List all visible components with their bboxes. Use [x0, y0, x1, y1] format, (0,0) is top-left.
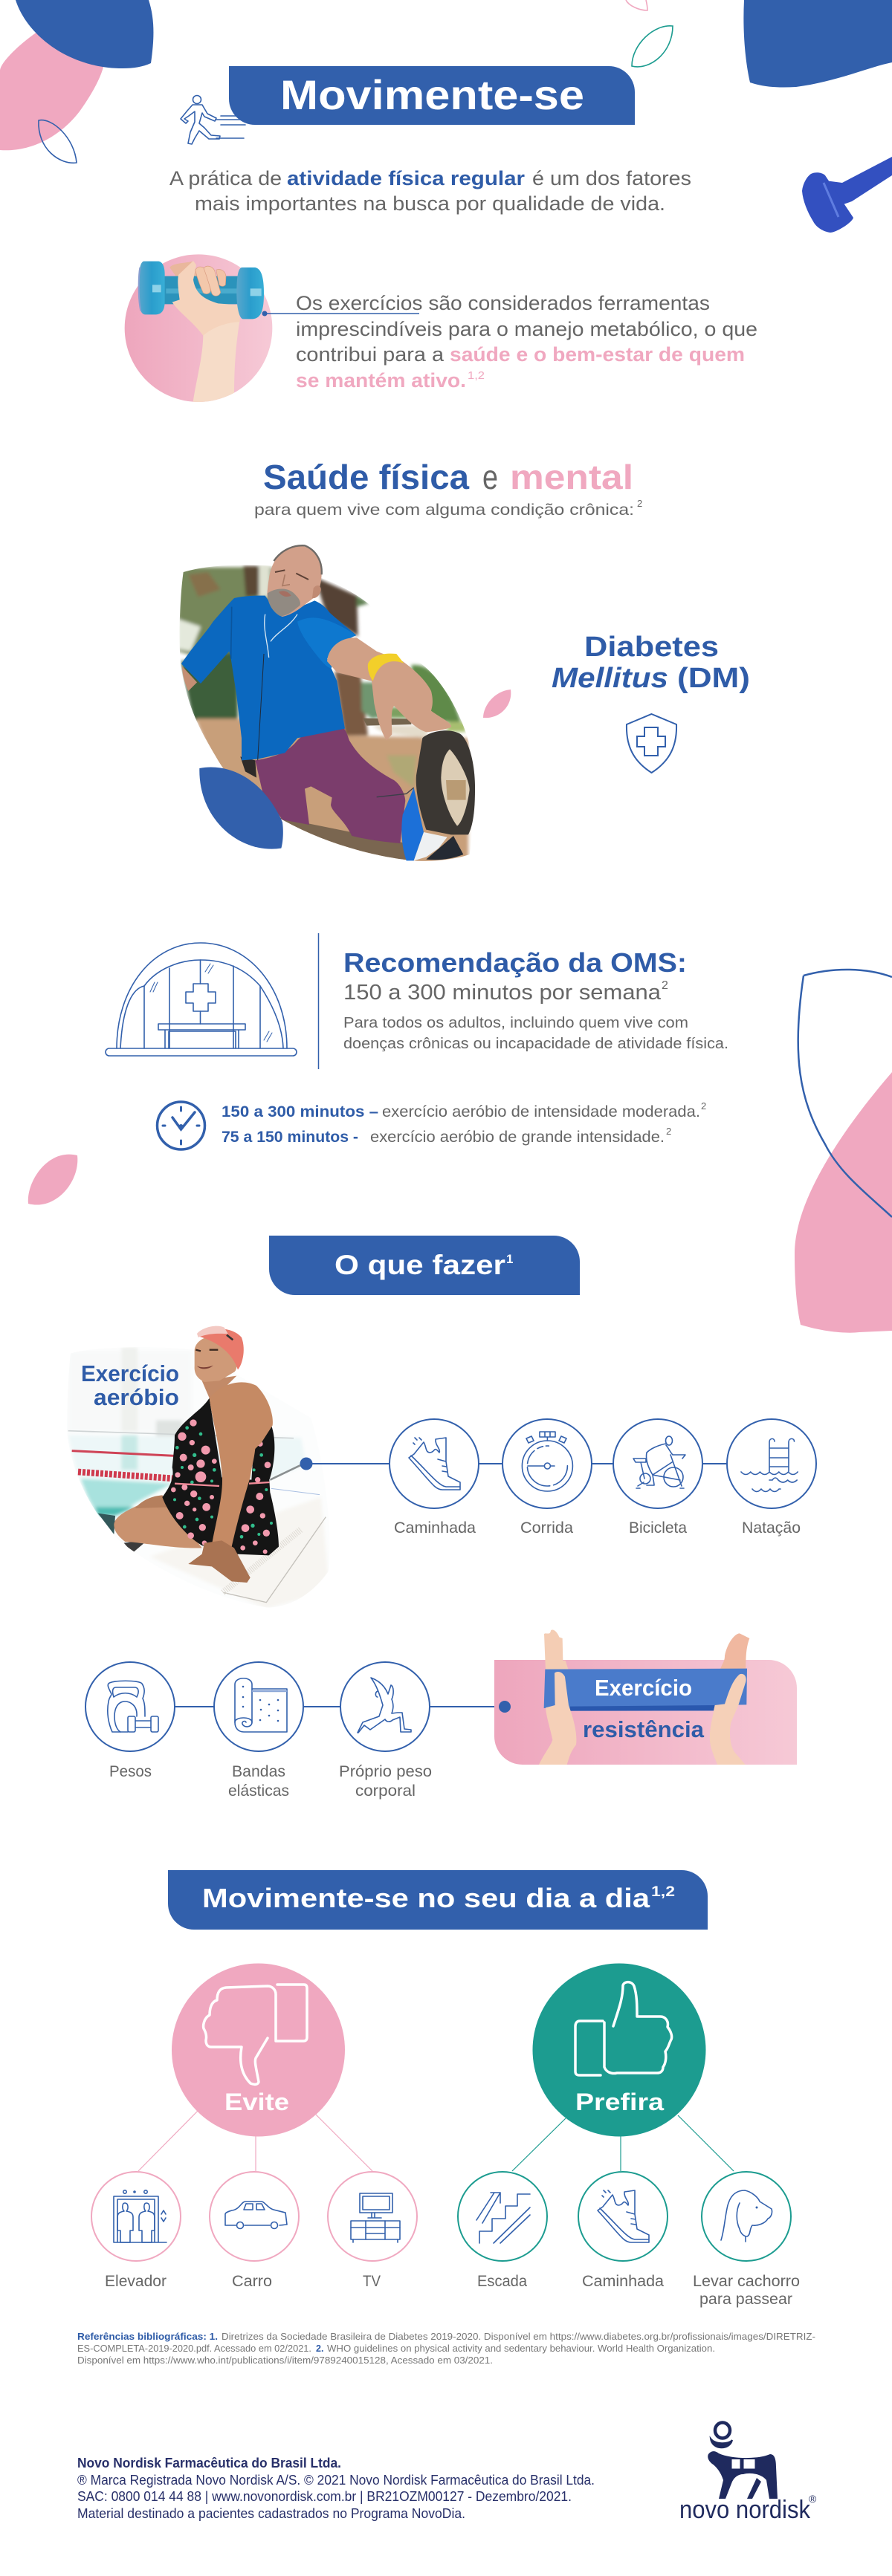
- text: Recomendação da OMS: 2: [662, 979, 668, 992]
- text: Exercício aeróbio: [81, 1360, 179, 1410]
- labels: resistance: Pesos: [109, 1762, 152, 1780]
- header: O que fazer: 1: [506, 1252, 513, 1266]
- references: ES-COMPLETA-2019-2020.pdf. Acessado em 02/2021.: [77, 2343, 311, 2354]
- text block: exercises: [296, 292, 757, 392]
- icon: próprio peso corporal: [340, 1662, 430, 1751]
- intro text: atividade física regular: [287, 167, 526, 189]
- photo: woman at the pool: [63, 1326, 336, 1616]
- text block: exercises: saúde e o bem-estar de quem: [450, 343, 745, 366]
- icon: pesos: [85, 1662, 175, 1751]
- labels: daily activities: Caminhada: [582, 2273, 664, 2290]
- header: O que fazer: [269, 1236, 580, 1295]
- panel: evite: Evite: [224, 2089, 289, 2115]
- labels: daily activities: Levar cachorro: [693, 2273, 800, 2290]
- text: Diabetes Mellitus: Mellitus: [552, 663, 668, 694]
- small pink leaf: [483, 690, 511, 718]
- connector lines: evite: [138, 2111, 372, 2171]
- references: 2.: [316, 2343, 323, 2354]
- icon: carro: [210, 2172, 299, 2261]
- icon: tv: [328, 2172, 417, 2261]
- text block: exercises: contribui para a: [296, 343, 444, 366]
- header: Movimente-se: Movimente-se: [280, 71, 584, 118]
- labels: daily activities: Elevador: [105, 2273, 167, 2290]
- panel: prefira: [532, 1963, 706, 2137]
- icon: natação: [727, 1419, 816, 1508]
- icon: corrida: [502, 1419, 592, 1508]
- references: [77, 2332, 815, 2366]
- footer company text: Novo Nordisk Farmacêutica do Brasil Ltda.: [77, 2456, 341, 2470]
- photo: man stretching: [178, 545, 483, 864]
- references: Referências bibliográficas: 1.: [77, 2332, 218, 2342]
- connector: resistance: [175, 1706, 505, 1707]
- labels: resistance: Bandas: [232, 1762, 285, 1780]
- logo: novo nordisk: ®: [809, 2493, 817, 2505]
- header: Movimente-se no seu dia a dia: 1,2: [651, 1884, 675, 1900]
- heading: saúde física e mental: para quem vive com alguma condição crônica:: [254, 502, 634, 519]
- intro text: mais importantes na busca por qualidade de vida.: [195, 192, 665, 215]
- header: Movimente-se: [229, 66, 635, 125]
- panel: resistance exercise with hands and band: Exercício: [595, 1675, 692, 1701]
- icon: caminhada: [390, 1419, 479, 1508]
- header: Movimente-se no seu dia a dia: [168, 1870, 708, 1930]
- panel: prefira: Prefira: [575, 2089, 664, 2115]
- text: minutes recommendations: exercício aeróbio de grande intensidade.: [370, 1129, 665, 1146]
- labels: aerobic: Bicicleta: [629, 1519, 687, 1537]
- references: Disponível em https://www.who.int/publications/i/item/9789240015128, Acessado em 03/2021.: [77, 2355, 493, 2366]
- text: Recomendação da OMS: [343, 947, 728, 1052]
- footer company text: ® Marca Registrada Novo Nordisk A/S. © 2021 Novo Nordisk Farmacêutica do Brasil Ltda.: [77, 2473, 595, 2488]
- labels: aerobic: Corrida: [520, 1519, 573, 1537]
- background leaves: top: [0, 0, 892, 163]
- text: minutes recommendations: 150 a 300 minutos –: [222, 1103, 378, 1120]
- icon: cachorro: [702, 2172, 791, 2261]
- footer company text: [77, 2456, 595, 2521]
- text: Exercício aeróbio: aeróbio: [94, 1384, 179, 1410]
- icon: shield: [627, 714, 676, 773]
- text: minutes recommendations: exercício aeróbio de intensidade moderada.: [382, 1103, 700, 1120]
- text: Exercício aeróbio: Exercício: [81, 1360, 179, 1386]
- labels: resistance: elásticas: [228, 1782, 289, 1800]
- references: Diretrizes da Sociedade Brasileira de Diabetes 2019-2020. Disponível em https://www.diabetes.org.br/profissionais/images/DIRETRIZ-: [222, 2332, 815, 2342]
- labels: daily activities: TV: [363, 2273, 381, 2290]
- text: minutes recommendations: 2: [666, 1126, 671, 1137]
- footer company text: Material destinado a pacientes cadastrados no Programa NovoDia.: [77, 2506, 465, 2521]
- connector: aerobic: [300, 1458, 727, 1470]
- divider: [318, 933, 320, 1069]
- text: Recomendação da OMS: Para todos os adultos, incluindo quem vive com: [343, 1014, 688, 1031]
- labels: aerobic: Natação: [742, 1519, 801, 1537]
- heading: saúde física e mental: 2: [637, 498, 642, 509]
- text: minutes recommendations: [222, 1100, 706, 1146]
- background leaves: middle: [28, 970, 892, 1333]
- icon: hospital dome: [106, 943, 297, 1056]
- logo: novo nordisk: [679, 2422, 817, 2524]
- header: Movimente-se no seu dia a dia: Movimente-se no seu dia a dia: [202, 1883, 650, 1913]
- labels: resistance: Próprio peso: [339, 1762, 432, 1780]
- icon: bicicleta: [613, 1419, 702, 1508]
- intro text: A prática de: [169, 167, 282, 189]
- text: Diabetes Mellitus: (DM): [677, 663, 750, 694]
- labels: daily activities: [105, 2273, 800, 2308]
- text: minutes recommendations: 2: [701, 1100, 706, 1112]
- icon: clock: [158, 1102, 205, 1149]
- text block: exercises: imprescindíveis para o manejo metabólico, o que: [296, 318, 757, 340]
- header: O que fazer: O que fazer: [334, 1250, 505, 1280]
- footer company text: SAC: 0800 014 44 88 | www.novonordisk.com.br | BR21OZM00127 - Dezembro/2021.: [77, 2489, 572, 2504]
- heading: saúde física e mental: e: [482, 458, 498, 496]
- connector lines: prefira: [512, 2115, 734, 2171]
- icon: escada: [458, 2172, 547, 2261]
- text: minutes recommendations: 75 a 150 minutos -: [222, 1129, 358, 1146]
- icon: bandas elásticas: [214, 1662, 303, 1751]
- text block: exercises: se mantém ativo.: [296, 369, 466, 392]
- callout line: [262, 311, 419, 317]
- labels: resistance: [109, 1762, 432, 1800]
- labels: aerobic: Caminhada: [394, 1519, 476, 1537]
- logo: novo nordisk: novo nordisk: [679, 2496, 811, 2524]
- labels: daily activities: Escada: [477, 2273, 527, 2290]
- labels: daily activities: Carro: [232, 2273, 272, 2290]
- labels: aerobic: [394, 1519, 801, 1537]
- heading: saúde física e mental: mental: [510, 458, 633, 496]
- intro text: [169, 167, 691, 215]
- text: Diabetes Mellitus: [552, 632, 750, 694]
- text: Diabetes Mellitus: Diabetes: [584, 632, 719, 663]
- text: Recomendação da OMS: 150 a 300 minutos por semana: [343, 981, 662, 1005]
- text: Recomendação da OMS: Recomendação da OMS:: [343, 947, 687, 978]
- labels: resistance: corporal: [355, 1782, 416, 1800]
- icon: caminhada (prefira): [578, 2172, 668, 2261]
- intro text: é um dos fatores: [532, 167, 691, 189]
- panel: resistance exercise with hands and band: resistência: [583, 1716, 705, 1742]
- icon: blue dumbbell: [802, 157, 892, 233]
- heading: saúde física e mental: [254, 458, 642, 519]
- panel: evite: [172, 1963, 345, 2137]
- references: WHO guidelines on physical activity and sedentary behaviour. World Health Organization.: [327, 2343, 715, 2354]
- photo: hand lifting dumbbell: [125, 254, 272, 404]
- text: Recomendação da OMS: doenças crônicas ou incapacidade de atividade física.: [343, 1035, 728, 1052]
- text block: exercises: 1,2: [468, 369, 485, 382]
- heading: saúde física e mental: Saúde física: [263, 458, 469, 496]
- icon: elevador: [91, 2172, 181, 2261]
- icon: runner: [181, 95, 245, 144]
- text block: exercises: Os exercícios são considerados ferramentas: [296, 292, 710, 314]
- panel: resistance exercise with hands and band: [494, 1629, 797, 1765]
- labels: daily activities: para passear: [699, 2291, 792, 2308]
